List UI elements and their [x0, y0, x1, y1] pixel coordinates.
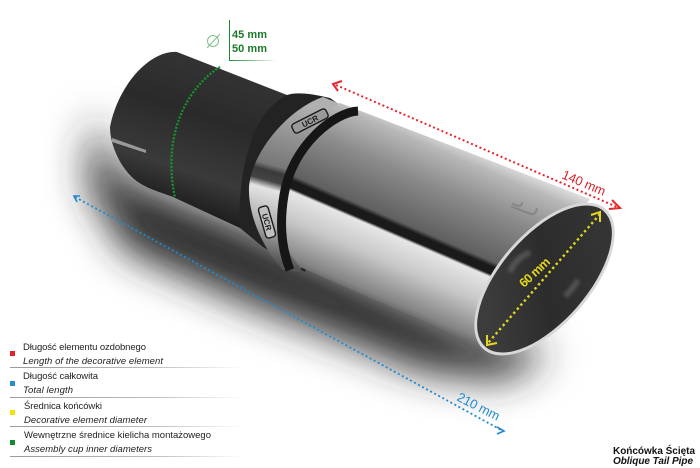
top logo: [291, 108, 329, 134]
dimension: 60 mm: [487, 212, 600, 345]
legend item: green: [10, 430, 244, 457]
weld collar: [240, 93, 350, 272]
legend item: yellow: Średnica końcówki: [24, 400, 102, 412]
pipe opening: [453, 183, 636, 375]
legend item: yellow: Decorative element diameter: [24, 415, 148, 426]
silver ring: [249, 97, 350, 272]
legend item: red: [10, 342, 244, 368]
pipe shadow: [88, 115, 550, 380]
dimension: 60 mm: 60 mm: [516, 255, 553, 290]
dimension: 210 mm: 210 mm: [455, 389, 502, 424]
black band: [282, 111, 358, 270]
product title: Oblique Tail Pipe: [613, 456, 693, 467]
product title: [613, 444, 695, 467]
embossed logo on tube: [488, 183, 540, 215]
diameter values: 45 mm: [232, 29, 267, 41]
legend item: blue: Długość całkowita: [23, 371, 99, 382]
legend item: red: Length of the decorative element: [23, 356, 163, 367]
top logo: UCR: [300, 113, 320, 129]
legend item: red: Długość elementu ozdobnego: [23, 342, 146, 353]
diameter symbol: [207, 34, 220, 48]
dimension: 140 mm: 140 mm: [560, 167, 608, 199]
cup slot: [112, 138, 146, 153]
dimension: 140 mm: [333, 81, 620, 209]
side logo: UCR: [260, 213, 273, 232]
pipe rim: [449, 179, 640, 379]
legend: [10, 342, 244, 457]
dimension: cup diameter: 50 mm: [232, 43, 267, 55]
legend item: blue: Total length: [23, 385, 73, 396]
dimension: cup diameter: [171, 20, 277, 198]
product title: Końcówka Ścięta: [613, 444, 695, 457]
legend item: green: Wewnętrzne średnice kielicha montażowego: [24, 430, 211, 441]
dotted arc: [171, 67, 220, 198]
legend item: blue: [10, 371, 244, 398]
bracket: [228, 20, 230, 60]
inner reflections: [510, 252, 578, 296]
legend item: green: Assembly cup inner diameters: [23, 444, 152, 455]
chrome tube: [282, 103, 590, 345]
assembly cup: [110, 52, 310, 240]
tail pipe: [110, 52, 640, 379]
side logo: [258, 205, 276, 239]
legend item: yellow: [10, 400, 244, 427]
